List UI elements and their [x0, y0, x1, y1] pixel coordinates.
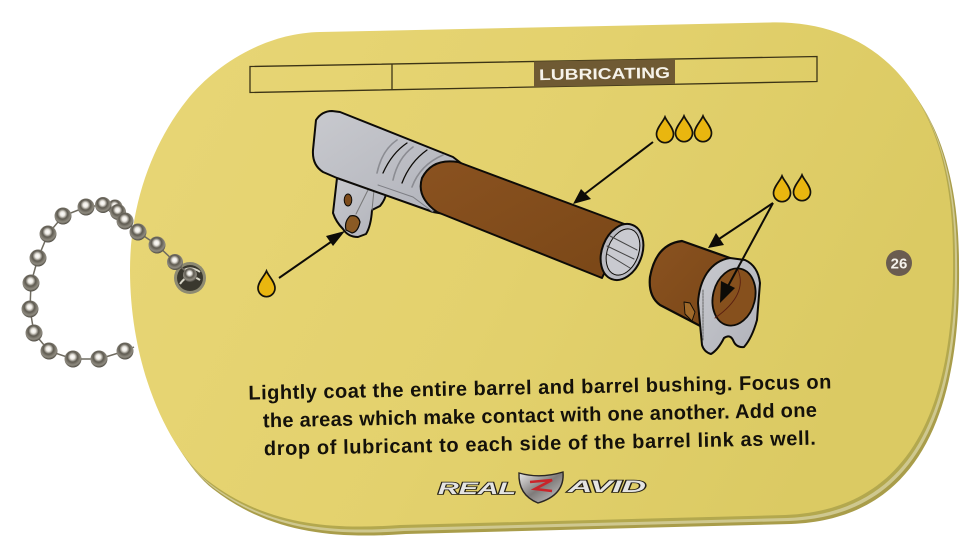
drops: two	[774, 175, 810, 202]
arrow to barrel	[573, 142, 653, 204]
logo: Real Avid: AVID	[566, 477, 646, 496]
barrel silver hood	[313, 111, 470, 215]
logo shield	[519, 472, 563, 503]
key chain	[22, 197, 206, 368]
header tab bar	[250, 56, 817, 92]
bushing body	[650, 241, 730, 330]
active tab: lubricating	[534, 59, 675, 87]
instruction text	[248, 371, 832, 460]
barrel link lug	[333, 178, 386, 237]
yellow tag card	[130, 22, 953, 527]
instruction text: Lightly coat the entire barrel and barrel bushing. Focus on	[248, 371, 832, 405]
illustration: barrel	[313, 111, 761, 354]
arrow to barrel link	[279, 231, 345, 278]
drop: single	[258, 271, 275, 297]
logo: Real Avid	[438, 472, 646, 503]
page number badge	[886, 250, 912, 276]
eyelet	[174, 262, 206, 294]
arrow to bushing outside	[708, 203, 773, 248]
instruction text: the areas which make contact with one another. Add one	[263, 400, 817, 432]
bushing flange	[698, 258, 760, 354]
instruction text: drop of lubricant to each side of the barrel link as well.	[264, 428, 816, 460]
barrel muzzle	[593, 218, 651, 286]
arrows	[279, 142, 773, 303]
barrel tube	[421, 161, 627, 278]
active tab: lubricating: LUBRICATING	[539, 65, 670, 84]
drops: three	[656, 116, 712, 143]
arrow to bushing inside	[720, 203, 773, 303]
page number badge: 26	[891, 256, 907, 272]
logo: Real Avid: REAL	[438, 479, 516, 498]
page stack edge	[132, 25, 959, 536]
